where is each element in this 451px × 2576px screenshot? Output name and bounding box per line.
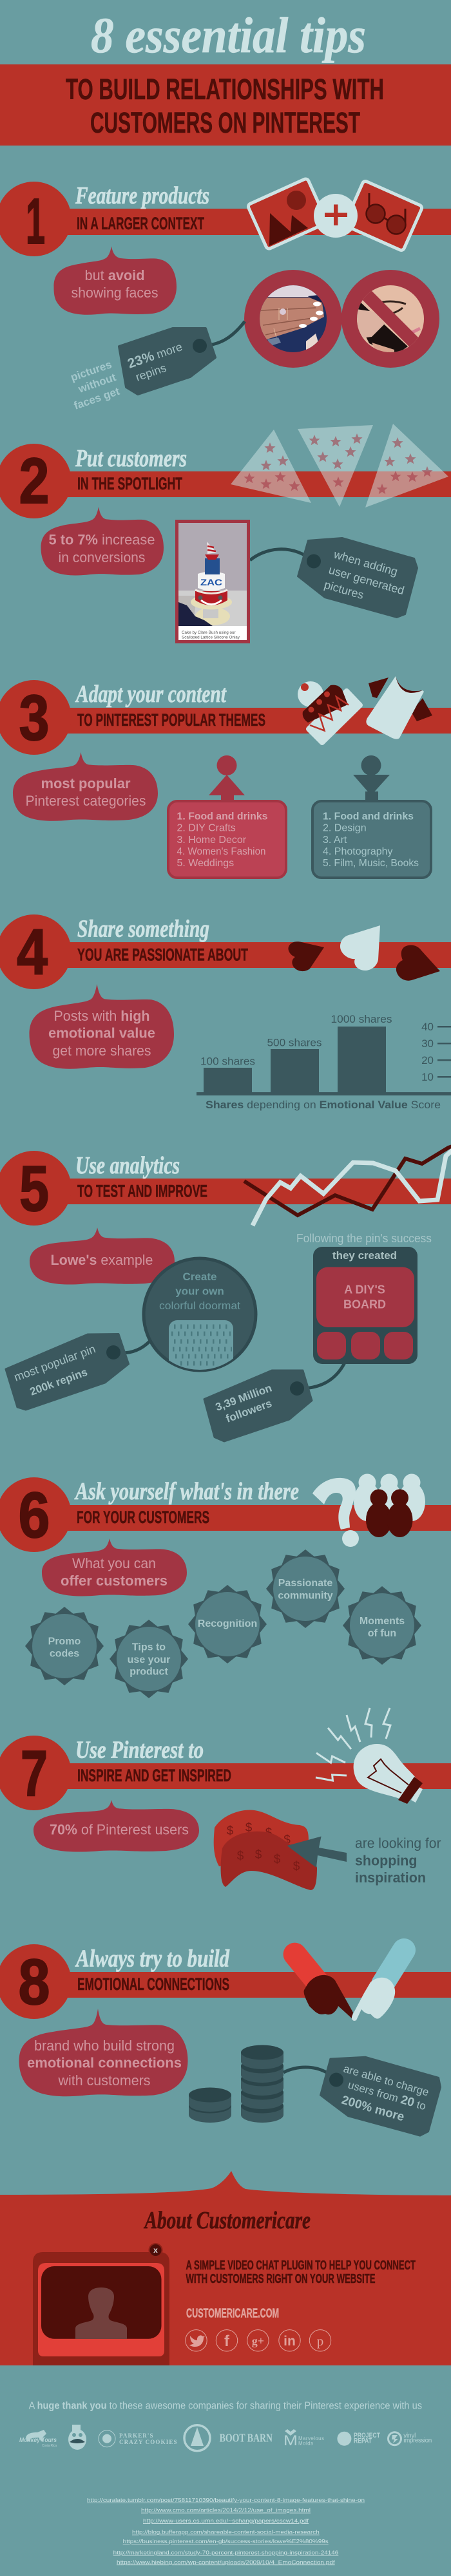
callout: 5 to 7% increase [41,507,164,575]
bar chart: shares by emotional value: 30 [421,1037,434,1050]
tag: when adding user generated pictures: pictures [323,578,365,601]
callout: 70% of Pinterest users [34,1800,199,1852]
tip 4 header: 4 [17,916,48,988]
bar chart: shares by emotional value: 100 shares [200,1056,255,1068]
text: pictures without faces get [69,358,121,412]
icon: money flags: $ [283,1833,291,1847]
badge: moments of fun [343,1586,421,1665]
tip 6 header: 6 [18,1479,50,1551]
magnifier: create your own colorful doormat: colorful doormat [159,1300,240,1312]
tip 2 header [0,444,451,518]
tip 2 header: Put customers [75,445,187,472]
icon: female symbol and list [168,755,286,878]
badge: promo codes [25,1607,104,1685]
source links: http://www-users.cs.umn.edu/~schang/papers/cscw14.pdf [143,2517,309,2524]
source links: http://curalate.tumblr.com/post/75811710390/beautify-your-content-8-image-features-that-shine-on [87,2497,365,2503]
text: are looking for shopping inspiration [355,1835,441,1886]
board: they created a DIY's board [313,1247,417,1364]
tag: when adding user generated pictures: when adding [332,547,399,578]
tip 8 header [0,1944,451,2019]
logo: Boot Barn: BOOT BARN [220,2432,273,2445]
callout: 5 to 7% increase: 5 to 7% increase [49,532,155,547]
tag: most popular pin 200k repins [6,1334,129,1410]
callout: posts with high emotional value: emotional value [48,1025,155,1041]
badge: passionate community [266,1549,345,1628]
arrow: pointing to money [287,1837,347,1868]
logo: mustache character [68,2425,86,2450]
badge: passionate community: Passionate [278,1578,332,1589]
tip 6 panel [0,1473,451,1698]
tip 1 header: IN A LARGER CONTEXT [77,214,204,233]
tip 4 header: Share something [77,916,209,943]
icon: money flags: $ [227,1824,234,1838]
icon: coin stacks [189,2045,283,2123]
tip 4 header [0,914,451,989]
logo: pine tree seal [184,2425,210,2451]
bar chart: shares by emotional value: 1000 shares [331,1013,392,1025]
bar chart: shares by emotional value: 40 [421,1021,434,1033]
badge: recognition [188,1585,267,1663]
text: are looking for shopping inspiration: inspiration [355,1870,426,1886]
icon: money flags: $ [255,1848,262,1862]
tip 1 panel [0,178,451,412]
website link: CUSTOMERICARE.COM [186,2307,279,2321]
social icons: in [283,2334,296,2349]
about heading: About Customericare [144,2207,311,2234]
callout: what you can offer customers: What you can [72,1555,156,1571]
icon: male symbol and list: 3. Art [323,835,347,846]
magnifier: create your own colorful doormat: Create [183,1271,216,1283]
logo: Parker's Crazy Cookies: CRAZY COOKIES [119,2439,177,2445]
text: pictures without faces get: without [76,371,118,395]
callout: Lowe's example [30,1227,175,1285]
icon: cupcake [298,681,360,743]
icon: two pointing hands [295,1950,404,2021]
tip 6 header: Ask yourself what's in there [74,1478,299,1505]
source links: https://www.hiebing.com/wp-content/uploads/2009/10/4_EmoConnection.pdf [117,2559,335,2565]
tip 7 panel [0,1708,451,1890]
tip 8 header: Always try to build [75,1945,230,1972]
icon: female symbol and list: 2. DIY Crafts [177,823,236,834]
icon: female symbol and list: 4. Women's Fashion [177,846,265,857]
logo: Marvelous Molds: M [283,2432,298,2448]
callout: most popular Pinterest categories: Pinterest categories [26,793,146,809]
callout: most popular Pinterest categories [13,752,158,821]
bar chart: shares by emotional value: 500 shares [267,1037,322,1048]
tag: able to charge users from 20 to 200% more: 200% more [340,2094,406,2124]
text: following the pin's success: Following the pin's success [296,1232,432,1245]
icon: question mark [312,1478,359,1547]
text: are looking for shopping inspiration: are looking for [355,1835,441,1852]
icon: money flags: $ [265,1826,273,1840]
bar chart: shares by emotional value: 20 [421,1054,434,1066]
icon: money flags: $ [293,1860,300,1873]
logo: Monkey Tours: Monkey Tours [19,2437,57,2444]
magnifier: create your own colorful doormat: your own [175,1285,224,1297]
tip 7 header: INSPIRE AND GET INSPIRED [77,1766,231,1785]
tip 3 header: Adapt your content [75,681,227,708]
tip 5 header: 5 [19,1153,49,1225]
logo: Marvelous Molds: Molds [298,2441,313,2447]
badge: promo codes: Promo [48,1636,81,1647]
video chat widget [33,2244,169,2365]
tip 3 header [0,680,451,755]
badge: promo codes: codes [50,1648,79,1659]
tip 8 header: 8 [18,1946,50,2018]
logo: Marvelous Molds [283,2429,324,2448]
source links: http://marketingland.com/study-70-percent-pinterest-shopping-inspiration-24146 [113,2550,339,2556]
tip 7 header: Use Pinterest to [75,1736,204,1763]
icon: money flags: $ [245,1821,253,1835]
badge: moments of fun: of fun [368,1628,396,1639]
logo: Vinyl Impression: impression [403,2438,432,2445]
icon: analytics lines [244,1146,451,1226]
icon: plus [314,194,358,238]
tag: 3,39 Million followers [204,1370,312,1441]
badge: tips to use your product: Tips to [132,1642,166,1653]
callout: most popular Pinterest categories: most popular [41,775,131,791]
icon: male symbol and list: 5. Film, Music, Books [323,858,419,869]
tip 5 header [0,1151,451,1226]
logo: Project Repat: REPAT [354,2437,372,2445]
tip 8 panel [0,1944,451,2136]
tip 7 header: 7 [21,1738,48,1810]
tag: 3,39 Million followers: 3,39 Million [214,1382,273,1414]
magnifier: create your own colorful doormat [144,1258,256,1378]
tip 1 header: Feature products [75,182,209,209]
tag: able to charge users from 20 to 200% more: are able to charge [342,2063,430,2099]
tip 6 header [0,1477,451,1552]
icon: money flags: $ [237,1850,244,1863]
tip 3 header: 3 [19,682,49,754]
callout: posts with high emotional value [30,984,174,1069]
tag: when adding user generated pictures [298,538,417,618]
callout: brand who build strong emotional connections [19,2009,188,2096]
badge: moments of fun: Moments [360,1616,405,1627]
logo: Project Repat [337,2432,380,2446]
about description [186,2259,416,2286]
callout: 70% of Pinterest users: 70% of Pinterest users [50,1822,189,1838]
tag: 23% more repins: repins [134,361,168,384]
text: pictures without faces get: pictures [69,358,113,384]
icon: glasses card [344,180,423,251]
tip 3 panel [0,676,451,878]
tag: 23% more repins: 23% more [126,339,184,372]
tip 1 header [0,182,451,258]
tip 6 header: FOR YOUR CUSTOMERS [77,1508,209,1527]
bar chart: shares by emotional value: Shares depending on Emotional Value Score [206,1099,441,1111]
icon: female symbol and list: 1. Food and drinks [177,811,268,822]
photo: cake pin: ZAC [200,577,222,587]
title script line: 8 essential tips [91,7,366,63]
title [0,7,451,146]
tip 7 header [0,1736,451,1810]
social icons [186,2330,331,2351]
text: pictures without faces get: faces get [72,385,121,412]
title band [0,64,451,146]
badge: recognition: Recognition [198,1618,257,1629]
board: they created a DIY's board: BOARD [343,1298,386,1311]
source links [87,2497,365,2565]
tip 5 header: TO TEST AND IMPROVE [77,1181,207,1200]
bar chart: shares by emotional value: 10 [421,1071,434,1083]
callout: but avoid showing faces: showing faces [71,285,158,301]
logo: Project Repat: PROJECT [354,2432,380,2439]
callout: but avoid showing faces [54,246,177,315]
icon: male symbol and list: 4. Photography [323,846,393,857]
tip 2 panel [0,424,451,643]
photo: cake pin [175,520,250,643]
icon: male symbol and list: 1. Food and drinks [323,811,414,822]
icon: picture card [247,178,327,250]
tip 3 header: TO PINTEREST POPULAR THEMES [77,710,265,730]
photo: hand without face [244,270,342,368]
string: photo to tag [250,549,314,562]
logo: Parker's Crazy Cookies [99,2430,177,2447]
photo: cake pin: Scalloped Lattice Silicone Onlay [182,635,240,640]
icon: female symbol and list: 3. Home Decor [177,835,247,846]
tag: most popular pin 200k repins: 200k repins [28,1366,89,1398]
photo: face crossed out [341,270,439,368]
callout: but avoid showing faces: but avoid [85,267,144,283]
tip 4 panel [0,914,451,1111]
callout: 5 to 7% increase: in conversions [58,549,146,565]
logo: Monkey Tours: Costa Rica [42,2444,57,2448]
tag: able to charge users from 20 to 200% more [320,2057,441,2136]
tip 2 header: 2 [19,445,49,517]
callout: Lowe's example: Lowe's example [50,1252,153,1268]
badge: tips to use your product: use your [128,1654,170,1665]
logo: Parker's Crazy Cookies: PARKER'S [119,2432,153,2439]
tip 1 header: 1 [26,185,45,258]
logo: Vinyl Impression [388,2432,432,2445]
callout: brand who build strong emotional connections: brand who build strong [34,2038,175,2054]
title subtitle [66,73,384,139]
icon: hearts [288,925,440,981]
tag: most popular pin 200k repins: most popular pin [12,1342,97,1384]
callout: what you can offer customers [42,1539,187,1596]
icon: t-shirt [366,676,432,739]
icon: group of people [354,1473,425,1537]
callout: brand who build strong emotional connections: emotional connections [27,2054,182,2071]
callout: posts with high emotional value: get more shares [53,1043,151,1059]
source links: http://blog.bufferapp.com/shareable-content-social-media-research [132,2529,320,2535]
icon: money flags [214,1810,317,1890]
tip 2 header: IN THE SPOTLIGHT [77,474,182,493]
about background [0,2171,451,2365]
board: they created a DIY's board: they created [332,1249,397,1262]
icon: female symbol and list: 5. Weddings [177,858,234,869]
tag: able to charge users from 20 to 200% more: users from 20 to [347,2078,428,2113]
tag: when adding user generated pictures: user generated [327,564,406,597]
string: coins to tag [283,2067,336,2080]
badge: tips to use your product: product [130,1667,168,1678]
badge: tips to use your product [110,1620,188,1698]
social icons: f [224,2333,230,2350]
icon: light bulb [316,1708,423,1804]
social icons: g+ [252,2334,264,2347]
bar chart: shares by emotional value [197,1013,451,1111]
callout: what you can offer customers: offer customers [61,1573,168,1589]
tip 4 header: YOU ARE PASSIONATE ABOUT [77,945,248,965]
text: are looking for shopping inspiration: shopping [355,1852,417,1869]
tag: 3,39 Million followers: followers [224,1397,273,1425]
icon: money flags: $ [274,1853,281,1866]
string: doormat to tag [113,1341,149,1353]
board: they created a DIY's board: A DIY'S [344,1283,385,1296]
video chat widget: x [153,2246,158,2255]
callout: posts with high emotional value: Posts with high [54,1008,149,1024]
company logos [19,2425,432,2451]
thank you line: A huge thank you to these awesome companies for sharing their Pinterest experience with us [29,2401,422,2412]
source links: http://www.cmo.com/articles/2014/2/12/use_of_images.html [141,2507,311,2514]
tip 5 panel [0,1146,451,1441]
logo: Vinyl Impression: vinyl [403,2432,416,2439]
string: board to tag [297,1363,345,1388]
tip 5 header: Use analytics [75,1152,180,1179]
tag: 23% more repins [119,321,245,394]
icon: bunting flags [231,424,448,507]
logo: Monkey Tours [19,2430,57,2448]
callout: brand who build strong emotional connections: with customers [58,2072,151,2088]
badge: passionate community: community [278,1590,333,1601]
social icons: p [317,2333,323,2349]
photo: cake pin: Cake by Clare Bush using our [182,630,236,635]
about panel [0,2171,451,2365]
icon: male symbol and list: 2. Design [323,823,367,834]
icon: male symbol and list [312,755,431,878]
source links: https://business.pinterest.com/en-gb/success-stories/lowe%E2%80%99s [123,2538,329,2544]
logo: Marvelous Molds: Marvelous [298,2436,324,2441]
tip 8 header: EMOTIONAL CONNECTIONS [77,1975,229,1994]
